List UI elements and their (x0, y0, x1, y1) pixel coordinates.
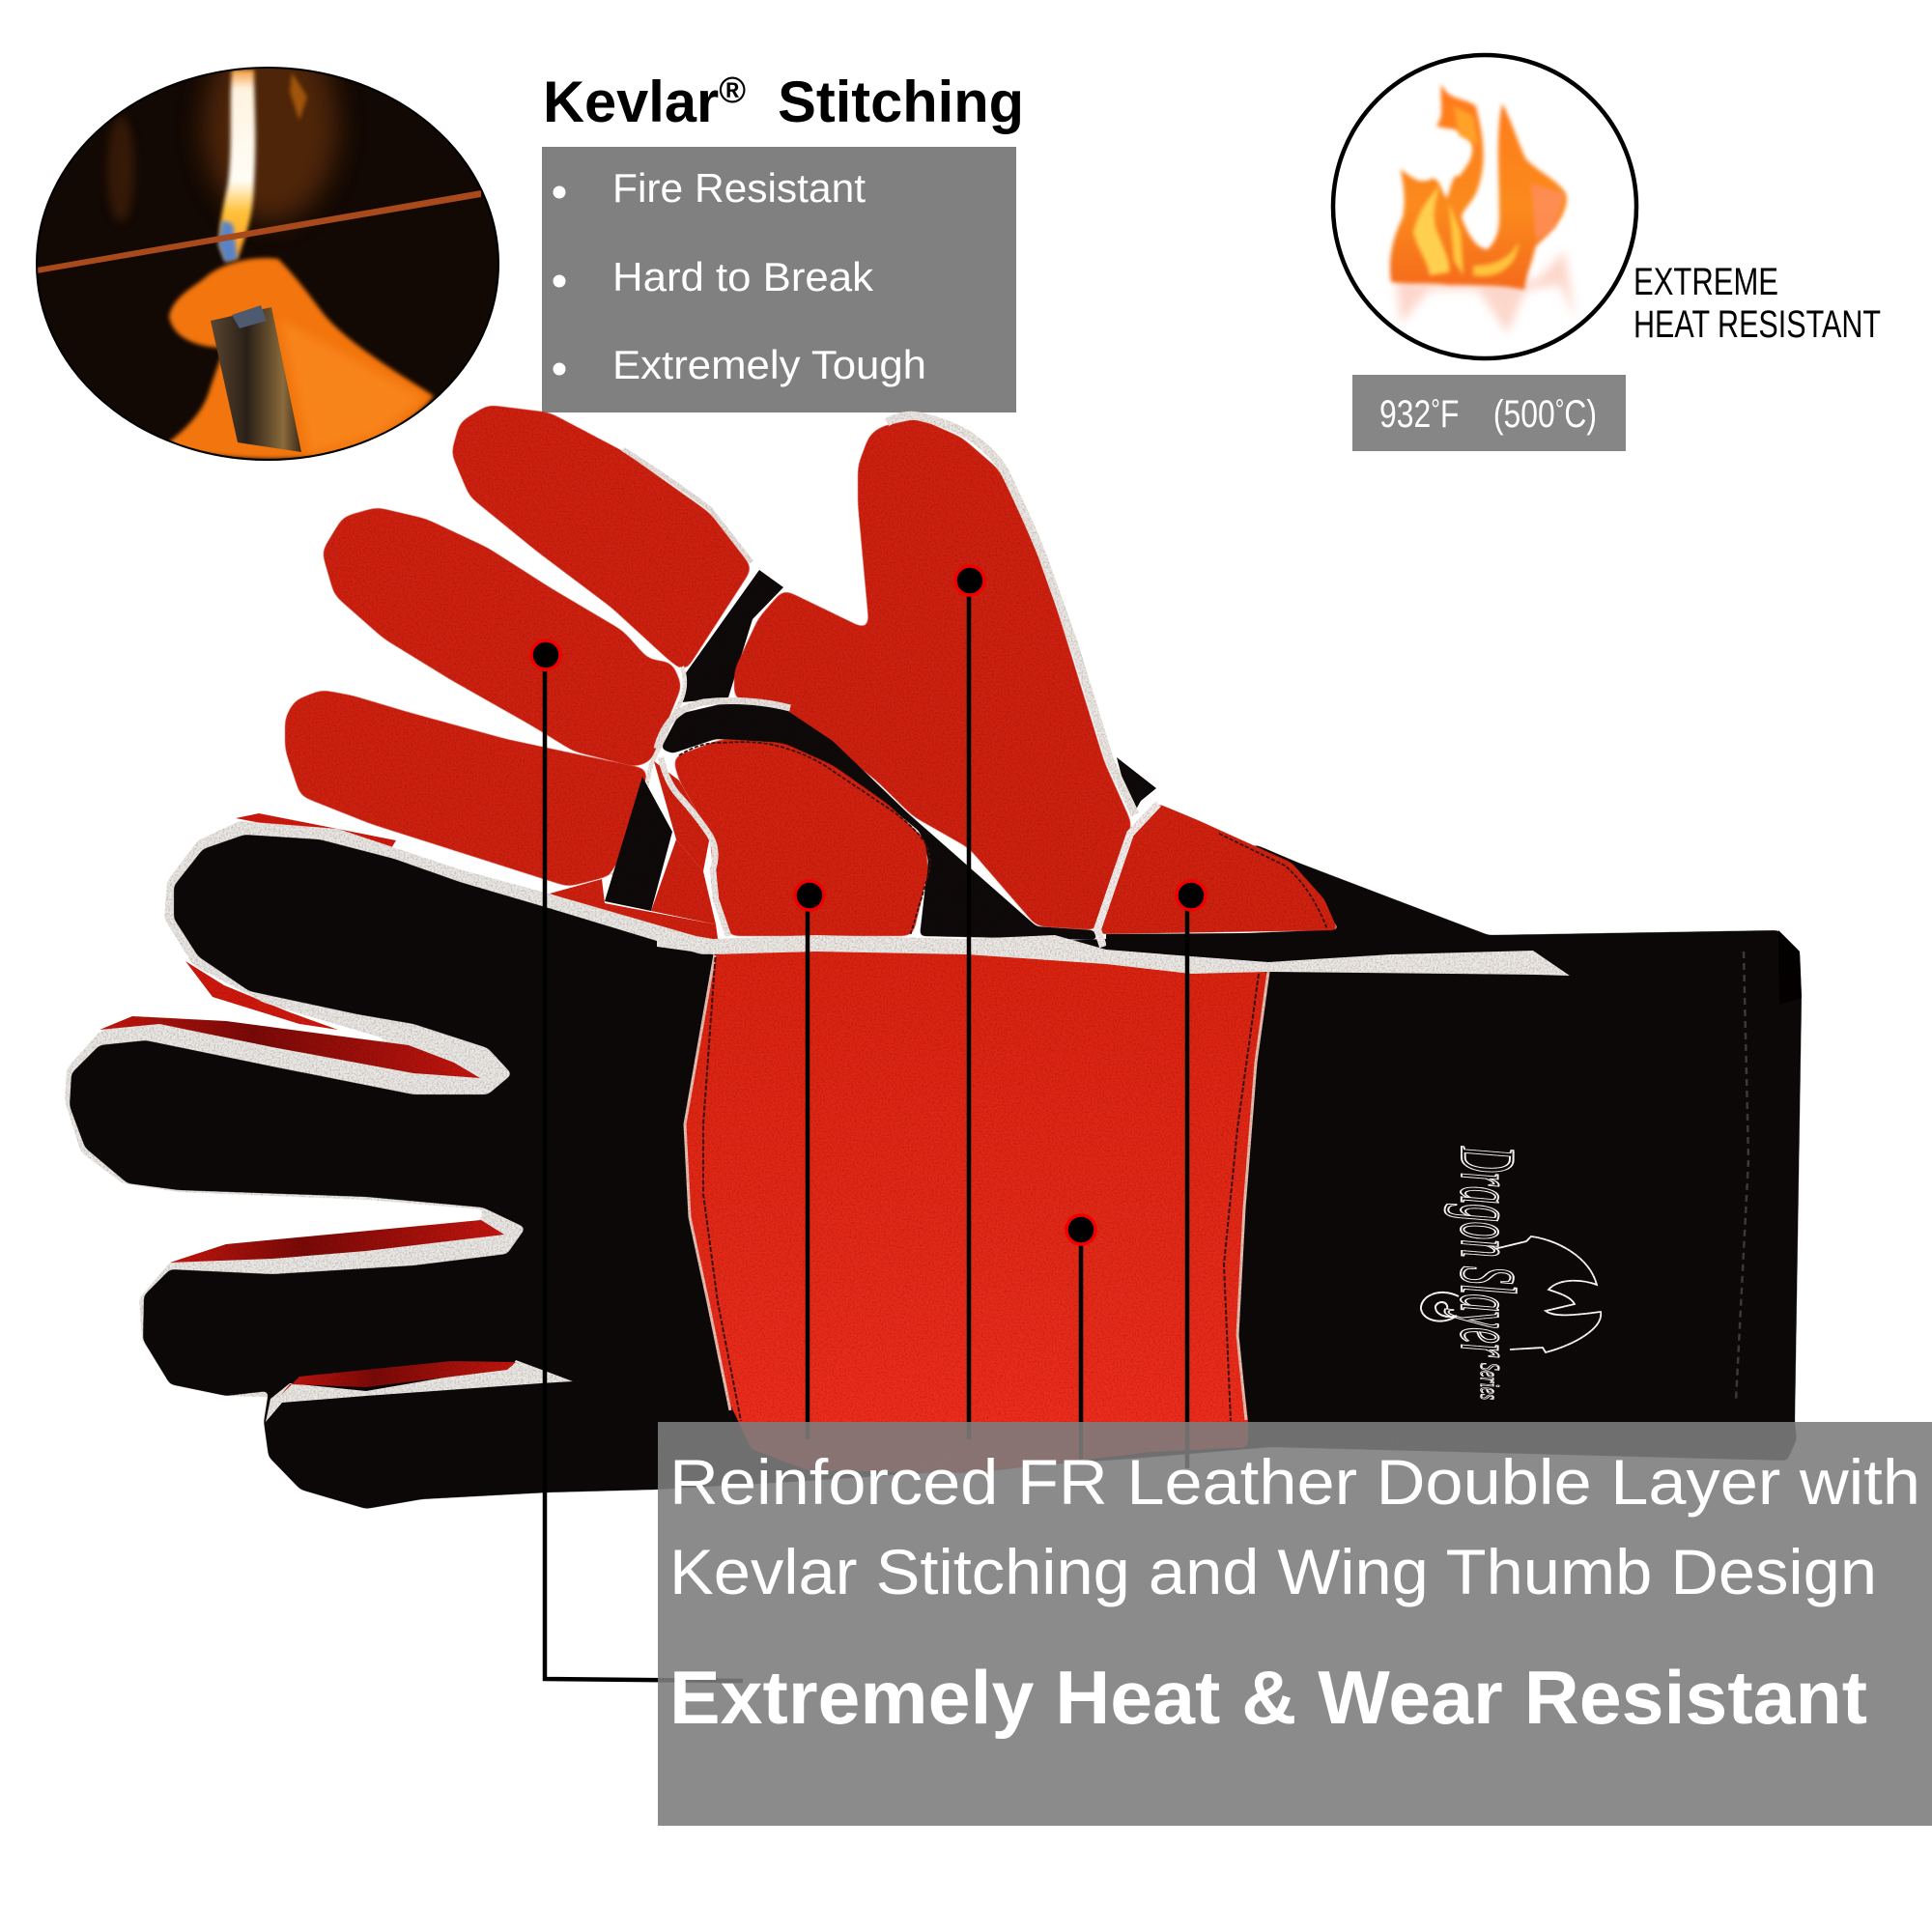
heading: Kevlar Stitching: Stitching (746, 70, 1024, 134)
glove: red reinforcement panel (685, 949, 1268, 1473)
callout line: left finger leader (531, 640, 743, 1681)
callout line: reinforced panel leader (1066, 1215, 1095, 1459)
bullet: Extremely Tough: Extremely Tough (612, 342, 926, 387)
glove (65, 405, 1802, 1509)
logo: Dragon Slayer Series: Dragon Slayer (1444, 1147, 1532, 1357)
glove: horizontal binding seam (657, 929, 1570, 976)
heading: Kevlar Stitching: ® (719, 71, 746, 111)
glove: red back slivers (185, 813, 396, 1030)
icon: dragon head outline (1494, 1236, 1601, 1352)
bullet: Hard to Break: Hard to Break (612, 254, 874, 299)
panel: Kevlar features (542, 147, 1016, 412)
label: extreme heat resistant: EXTREME (1634, 261, 1778, 303)
glove: right red cuff pad (1097, 804, 1391, 962)
photo: lighter flame on Kevlar thread (37, 29, 498, 460)
panel: temperature rating: ° (1431, 394, 1440, 426)
panel: temperature rating: C) (1564, 393, 1597, 436)
glove: black back with light edge binding (65, 821, 1802, 1509)
sliver: between first and second finger (99, 1016, 480, 1078)
swirl on the letter g (1421, 1293, 1459, 1321)
glove: red inner fingers and palm (285, 405, 1156, 952)
panel: temperature rating: 932 (1379, 393, 1444, 436)
heading: Kevlar Stitching: Kevlar (543, 70, 720, 134)
logo: Dragon Slayer Series: Series (1474, 1363, 1504, 1400)
text: reinforced leather line: Reinforced FR Leather Double Layer with (669, 1446, 1920, 1518)
cuff corner shadow (1778, 930, 1802, 1005)
sliver: between second and third finger (170, 1220, 504, 1263)
callout line: wing thumb leader (1177, 881, 1206, 1468)
logo: Dragon Slayer Series (1421, 1147, 1601, 1400)
callout line: palm pad leader (795, 881, 824, 1439)
bullet: Fire Resistant: Fire Resistant (612, 165, 866, 211)
callout line: thumb leader (955, 566, 984, 1439)
cuff stitching (1736, 952, 1748, 1401)
panel: temperature rating (1352, 375, 1626, 451)
panel: product summary (658, 1422, 1932, 1826)
panel: temperature rating: ° (1555, 394, 1564, 426)
icon: flame in circle (1333, 55, 1636, 358)
sliver: lowest finger binding (266, 1360, 573, 1422)
panel: temperature rating: F (500 (1440, 393, 1555, 436)
label: extreme heat resistant (1634, 261, 1881, 346)
text: kevlar stitching line: Kevlar Stitching and Wing Thumb Design (669, 1536, 1877, 1607)
text: heat and wear resistant: Extremely Heat & Wear Resistant (669, 1655, 1867, 1740)
